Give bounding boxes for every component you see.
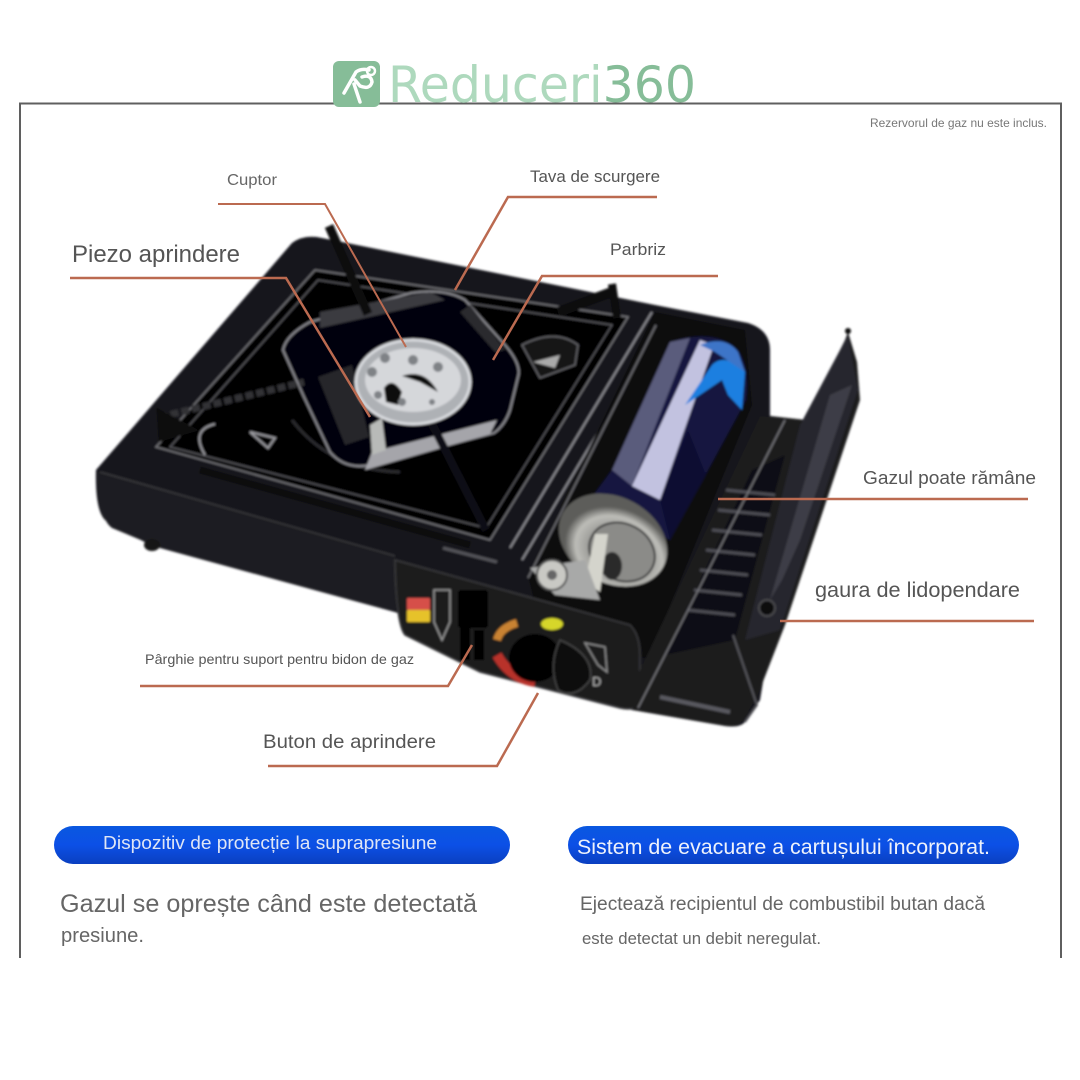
- stove body: [96, 237, 806, 726]
- heading pill: [54, 826, 510, 864]
- callout: Pârghie: [140, 645, 472, 686]
- callout: Piezo aprindere: Piezo aprindere: [72, 241, 240, 268]
- heading pill: [568, 826, 1019, 864]
- gas canister compartment: [528, 312, 752, 660]
- canister silver end: [542, 475, 684, 605]
- drip tray: [199, 292, 578, 470]
- callout: Pârghie: Pârghie pentru suport pentru bidon de gaz: [145, 651, 414, 667]
- callout: Gazul poate rămâne: Gazul poate rămâne: [863, 467, 1036, 488]
- control panel: D: [592, 674, 601, 689]
- illustration: portable gas stove: [96, 226, 860, 726]
- callout: Parbriz: [493, 240, 718, 360]
- callout: Parbriz: Parbriz: [610, 240, 666, 259]
- callout: Cuptor: Cuptor: [227, 172, 278, 189]
- panel: cartridge ejection system: [568, 826, 1019, 948]
- stove top plate: [156, 270, 662, 562]
- burner: [356, 340, 470, 455]
- callout: Buton de aprindere: Buton de aprindere: [263, 731, 436, 753]
- heading pill: Sistem de evacuare a cartușului încorporat.: [577, 836, 990, 859]
- control panel: [395, 560, 640, 709]
- front panel: [98, 472, 395, 612]
- logo text: Reduceri360: [388, 56, 696, 114]
- open lid: [630, 328, 860, 726]
- blue gas canister: [590, 337, 747, 540]
- description: Gazul se oprește când este detectată: [60, 890, 477, 918]
- callout: Tava de scurgere: Tava de scurgere: [530, 168, 660, 186]
- frame: [20, 104, 1061, 958]
- panel: overpressure protection: [54, 826, 510, 947]
- description: Ejectează recipientul de combustibil butan dacă: [580, 894, 985, 915]
- callout: Piezo aprindere: [70, 241, 370, 417]
- callout: Buton de aprindere: [263, 693, 538, 766]
- note: gas tank not included: Rezervorul de gaz nu este inclus.: [870, 116, 1047, 130]
- callout: Tava de scurgere: [455, 168, 660, 290]
- callout: Cuptor: [218, 172, 406, 347]
- description: presiune.: [61, 925, 144, 947]
- icon: logo mark: [333, 61, 380, 107]
- valve: [530, 560, 600, 600]
- callout: gaura de lidopendare: gaura de lidopendare: [815, 578, 1020, 602]
- heading pill: Dispozitiv de protecție la suprapresiune: [103, 832, 437, 853]
- pot supports: [158, 226, 617, 530]
- description: este detectat un debit neregulat.: [582, 930, 821, 948]
- logo: [333, 56, 696, 114]
